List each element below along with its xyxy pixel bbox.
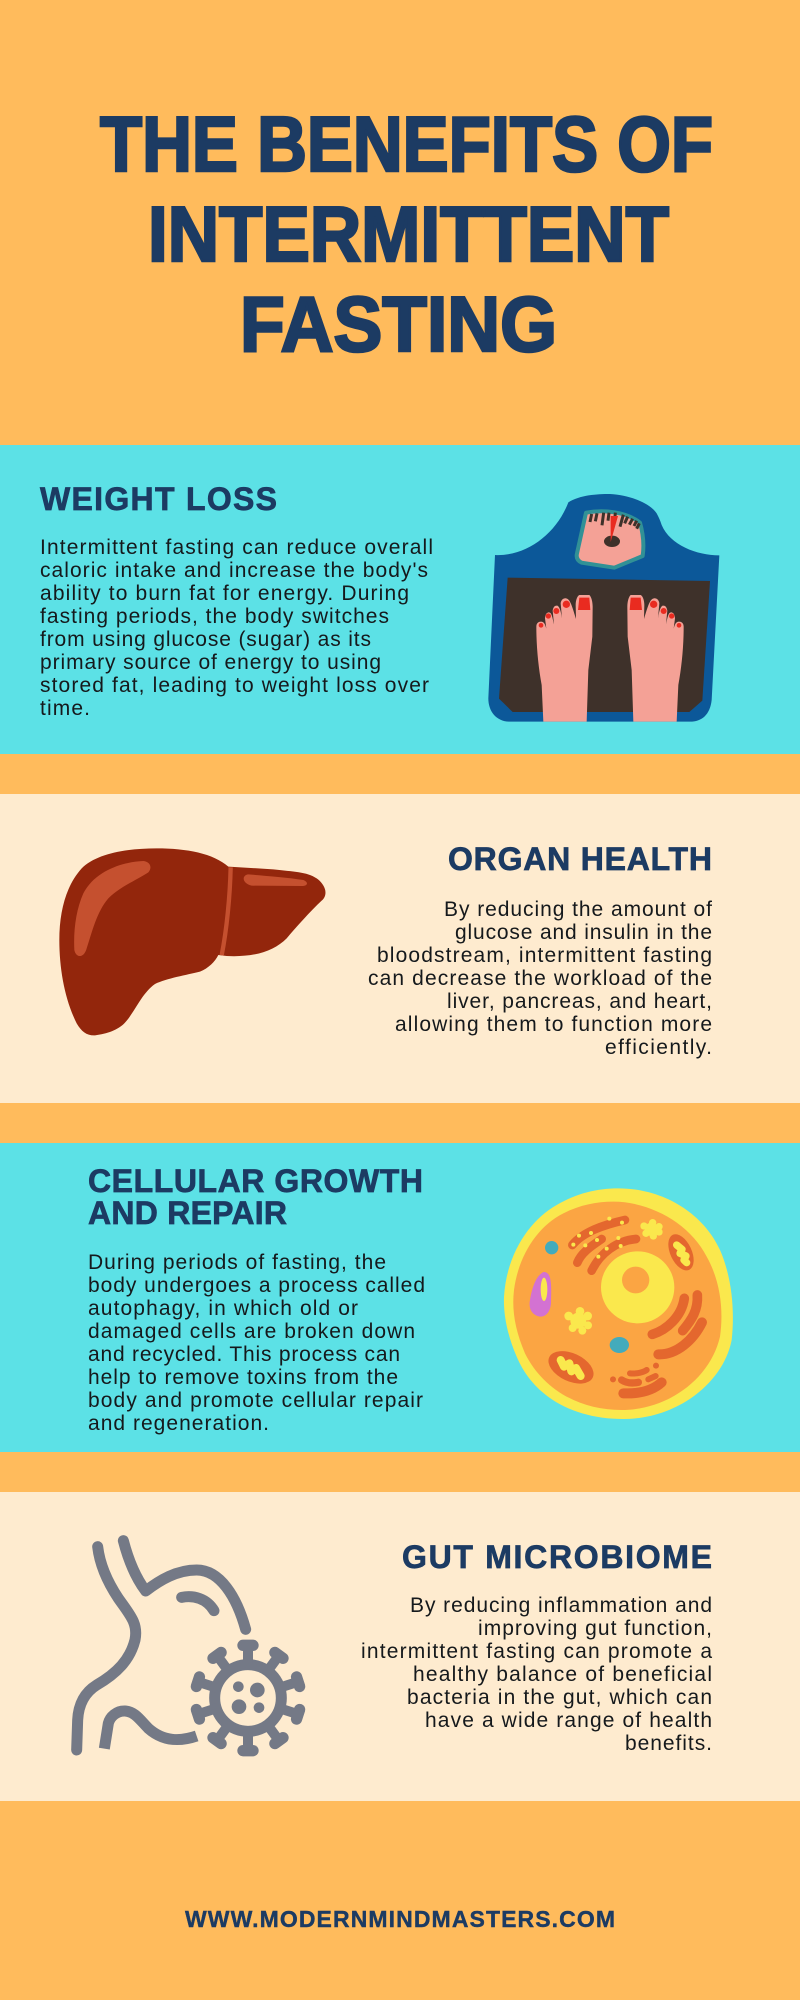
icon: bathroom scale with feet	[488, 494, 719, 722]
text block: gut microbiome: benefits.	[625, 1732, 712, 1755]
heading: organ health: ORGAN HEALTH	[448, 841, 712, 877]
panel: organ health	[0, 794, 800, 1103]
heading: cellular growth and repair: AND REPAIR	[88, 1195, 287, 1231]
text block: weight loss: stored fat, leading to weight loss over	[40, 674, 429, 697]
text block: cellular growth: damaged cells are broken down	[88, 1320, 415, 1343]
text block: gut microbiome	[361, 1594, 712, 1755]
icon: liver	[59, 848, 325, 1035]
title: FASTING	[240, 280, 557, 368]
text block: gut microbiome: bacteria in the gut, which can	[407, 1686, 712, 1709]
text block: weight loss: ability to burn fat for energy. During	[40, 582, 409, 605]
text block: organ health: can decrease the workload of the	[368, 967, 712, 990]
text block: weight loss: primary source of energy to using	[40, 651, 381, 674]
text block: weight loss: time.	[40, 697, 90, 720]
text block: cellular growth	[88, 1251, 425, 1435]
icon: animal cell	[504, 1188, 733, 1419]
text block: cellular growth: and regeneration.	[88, 1412, 269, 1435]
text block: organ health	[368, 898, 712, 1059]
text block: gut microbiome: improving gut function,	[478, 1617, 712, 1640]
heading: cellular growth and repair	[88, 1163, 423, 1231]
text block: weight loss	[40, 536, 433, 720]
text block: organ health: bloodstream, intermittent fasting	[377, 944, 712, 967]
text block: organ health: By reducing the amount of	[444, 898, 712, 921]
heading: cellular growth and repair: CELLULAR GROWTH	[88, 1163, 423, 1199]
footer website: WWW.MODERNMINDMASTERS.COM	[185, 1906, 615, 1932]
text block: gut microbiome: By reducing inflammation and	[410, 1594, 712, 1617]
text block: weight loss: Intermittent fasting can reduce overall	[40, 536, 433, 559]
panel: cellular growth and repair	[0, 1143, 800, 1452]
text block: cellular growth: autophagy, in which old or	[88, 1297, 358, 1320]
text block: organ health: glucose and insulin in the	[455, 921, 712, 944]
right foot	[627, 595, 684, 722]
title: INTERMITTENT	[148, 190, 669, 278]
heading: weight loss: WEIGHT LOSS	[40, 481, 277, 517]
text block: gut microbiome: healthy balance of beneficial	[413, 1663, 712, 1686]
text block: cellular growth: help to remove toxins from the	[88, 1366, 398, 1389]
text block: organ health: allowing them to function more	[395, 1013, 712, 1036]
title	[100, 100, 713, 368]
text block: organ health: efficiently.	[605, 1036, 712, 1059]
text block: weight loss: from using glucose (sugar) as its	[40, 628, 371, 651]
text block: cellular growth: and recycled. This process can	[88, 1343, 400, 1366]
text block: weight loss: fasting periods, the body switches	[40, 605, 389, 628]
heading: gut microbiome: GUT MICROBIOME	[402, 1539, 712, 1575]
icon: stomach with microbe	[77, 1541, 300, 1751]
panel: gut microbiome	[0, 1492, 800, 1801]
panel: weight loss	[0, 445, 800, 754]
text block: cellular growth: body undergoes a process called	[88, 1274, 425, 1297]
text block: cellular growth: body and promote cellular repair	[88, 1389, 423, 1412]
text block: gut microbiome: have a wide range of health	[425, 1709, 712, 1732]
microbe	[196, 1645, 300, 1751]
text block: cellular growth: During periods of fasting, the	[88, 1251, 386, 1274]
text block: weight loss: caloric intake and increase the body's	[40, 559, 428, 582]
title: THE BENEFITS OF	[100, 100, 713, 188]
left foot	[536, 595, 593, 722]
text block: gut microbiome: intermittent fasting can promote a	[361, 1640, 712, 1663]
text block: organ health: liver, pancreas, and heart,	[447, 990, 712, 1013]
